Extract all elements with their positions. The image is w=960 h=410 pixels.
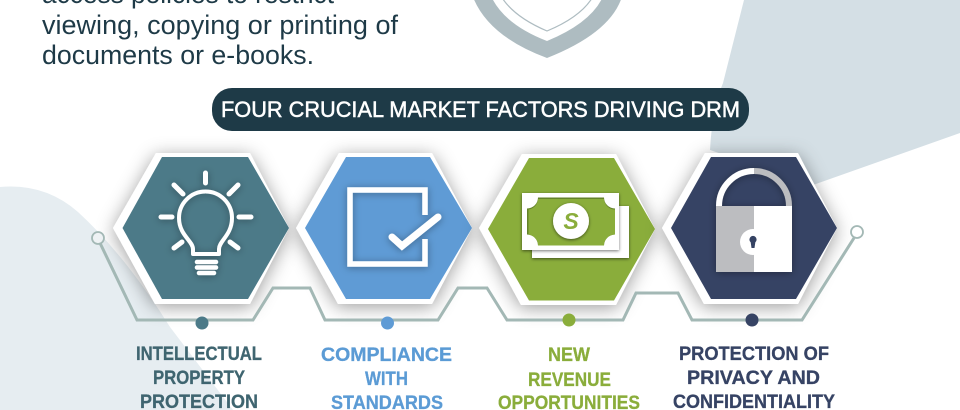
intro text [42, 0, 399, 70]
label: intellectual property protection: INTELLECTUAL [136, 343, 262, 365]
background shape: top right [710, 0, 960, 185]
label: compliance with standards: COMPLIANCE [321, 344, 452, 366]
label: intellectual property protection [136, 343, 262, 410]
intro text: viewing, copying or printing of [42, 10, 399, 40]
icon: banknotes [522, 193, 629, 258]
label: protection of privacy and confidentiality: PROTECTION OF [679, 343, 829, 365]
label: compliance with standards [321, 344, 452, 410]
intro text: documents or e-books. [42, 40, 314, 70]
marker dots [196, 314, 758, 330]
label: new revenue opportunities: NEW [548, 344, 591, 366]
label: intellectual property protection: PROPERTY [153, 367, 245, 389]
label: compliance with standards: WITH [365, 368, 408, 390]
icon: shield [470, 0, 624, 58]
background shape: bottom left [0, 187, 233, 410]
label: new revenue opportunities [498, 344, 640, 410]
connector line [92, 226, 863, 320]
icon: light bulb [161, 173, 251, 273]
icon: banknotes: S [563, 208, 579, 234]
label: protection of privacy and confidentiality: PRIVACY AND [687, 367, 820, 389]
heading pill: FOUR CRUCIAL MARKET FACTORS DRIVING DRM [221, 97, 740, 122]
icon: checkbox [350, 190, 438, 264]
hexagon 2: compliance [296, 153, 472, 304]
label: protection of privacy and confidentiality [673, 343, 835, 410]
hexagon 4: privacy [662, 153, 837, 304]
icon: padlock [716, 171, 792, 272]
heading pill [212, 88, 749, 131]
hexagon 3: revenue [479, 154, 655, 305]
hexagon 1: intellectual property [113, 153, 289, 304]
label: new revenue opportunities: REVENUE [528, 369, 611, 391]
